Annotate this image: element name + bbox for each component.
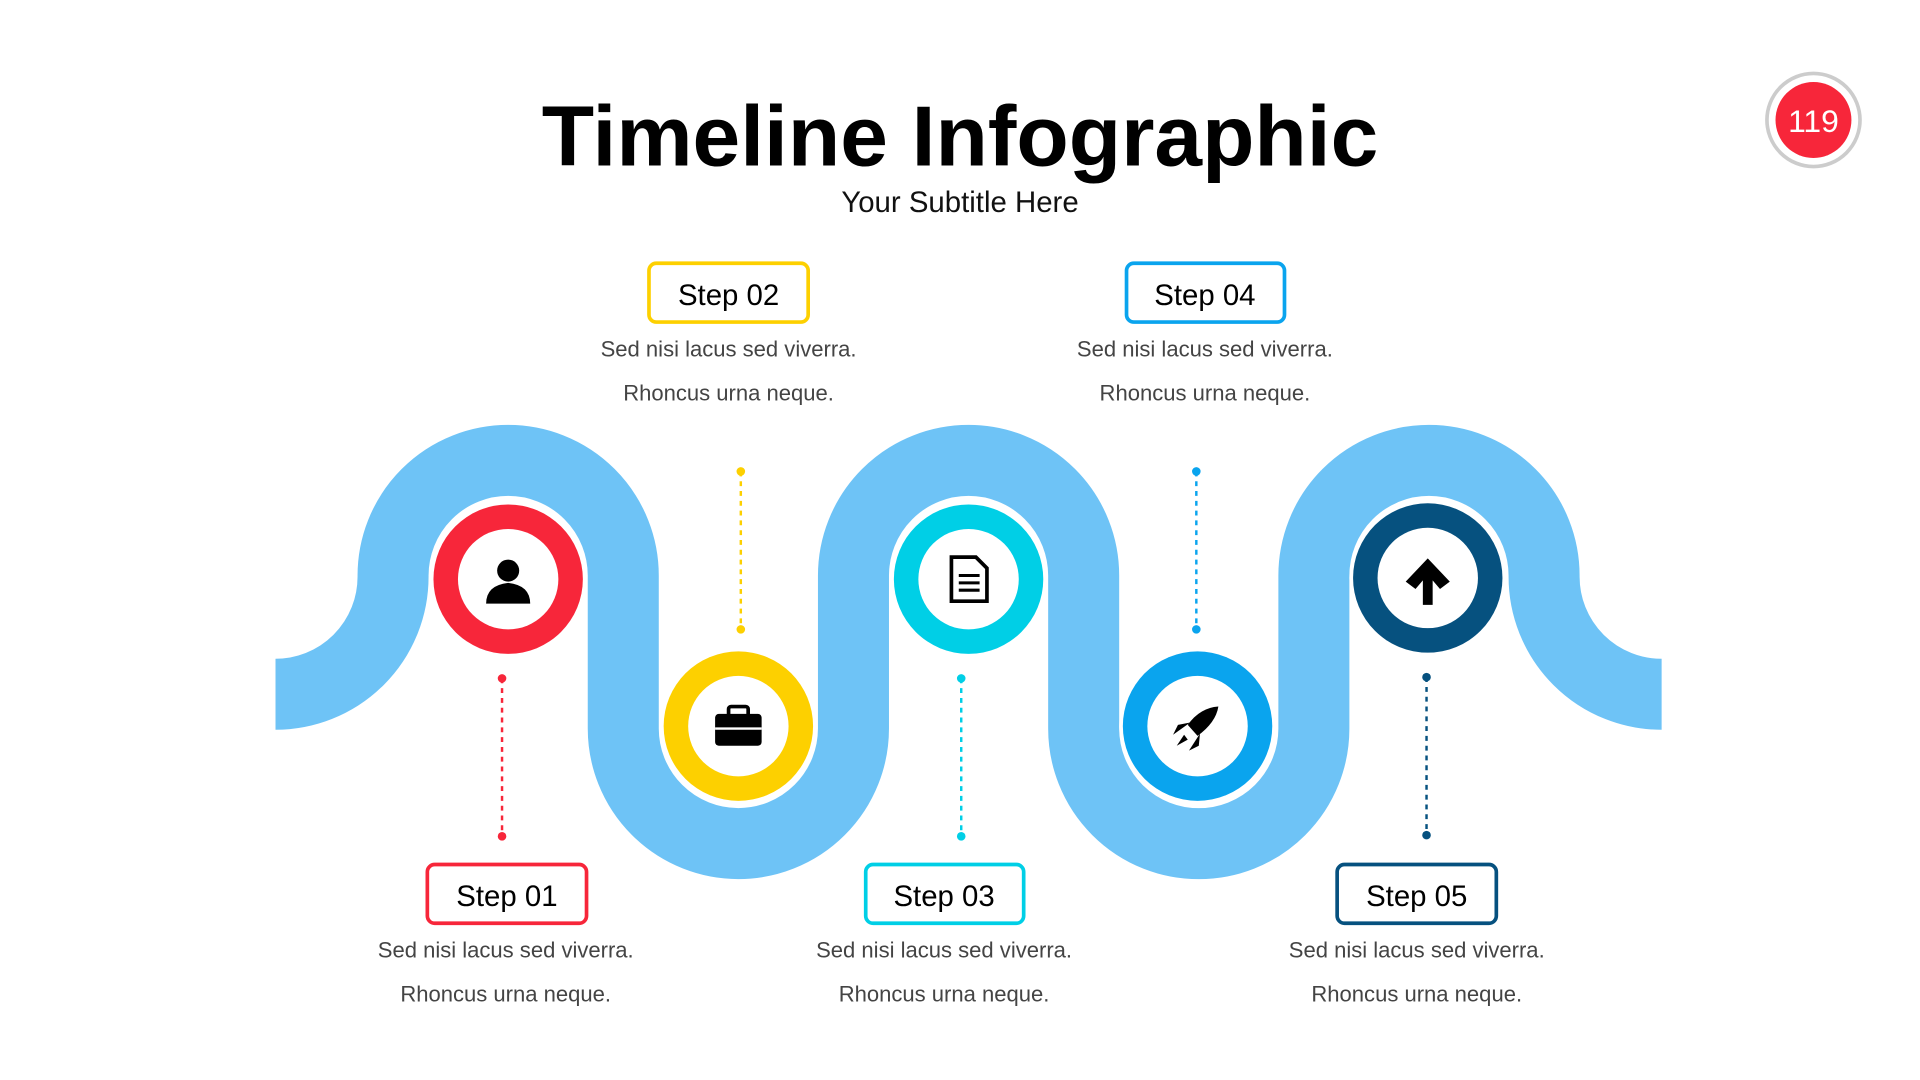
step 01 label: [378, 864, 634, 1007]
step 05 label: Step 05: [1366, 880, 1467, 913]
icon: document (step 3): [890, 501, 1047, 658]
step 04 label: Step 04: [1154, 279, 1256, 312]
step 02 label: Sed nisi lacus sed viverra.: [601, 336, 857, 361]
step 04 label: [1077, 263, 1333, 405]
page badge: [1767, 73, 1860, 167]
step 05 label: [1289, 864, 1545, 1007]
step 02 label: [601, 263, 857, 405]
step 01 label: Step 01: [456, 880, 558, 913]
step 03 label: Rhoncus urna neque.: [839, 982, 1049, 1007]
icon: arrow up (step 5): [1349, 500, 1506, 656]
icon: person (step 1): [430, 501, 587, 658]
icon: briefcase (step 2): [660, 648, 817, 804]
step 05 label: Sed nisi lacus sed viverra.: [1289, 938, 1545, 963]
icon: rocket (step 4): [1119, 648, 1276, 804]
step 04 label: Sed nisi lacus sed viverra.: [1077, 336, 1333, 361]
step 05 label: Rhoncus urna neque.: [1311, 982, 1522, 1007]
title: Timeline Infographic: [542, 88, 1378, 184]
step 03 label: [816, 864, 1072, 1007]
step 01 label: Sed nisi lacus sed viverra.: [378, 938, 634, 963]
page badge: 119: [1788, 103, 1839, 139]
connector lines: [502, 471, 1427, 836]
step 01 label: Rhoncus urna neque.: [400, 982, 611, 1007]
step 04 label: Rhoncus urna neque.: [1100, 380, 1310, 405]
step 02 label: Step 02: [678, 279, 779, 312]
step 03 label: Sed nisi lacus sed viverra.: [816, 938, 1072, 963]
wave road: [276, 460, 1662, 844]
step 03 label: Step 03: [893, 880, 995, 913]
step 02 label: Rhoncus urna neque.: [623, 380, 834, 405]
subtitle: Your Subtitle Here: [841, 186, 1079, 219]
